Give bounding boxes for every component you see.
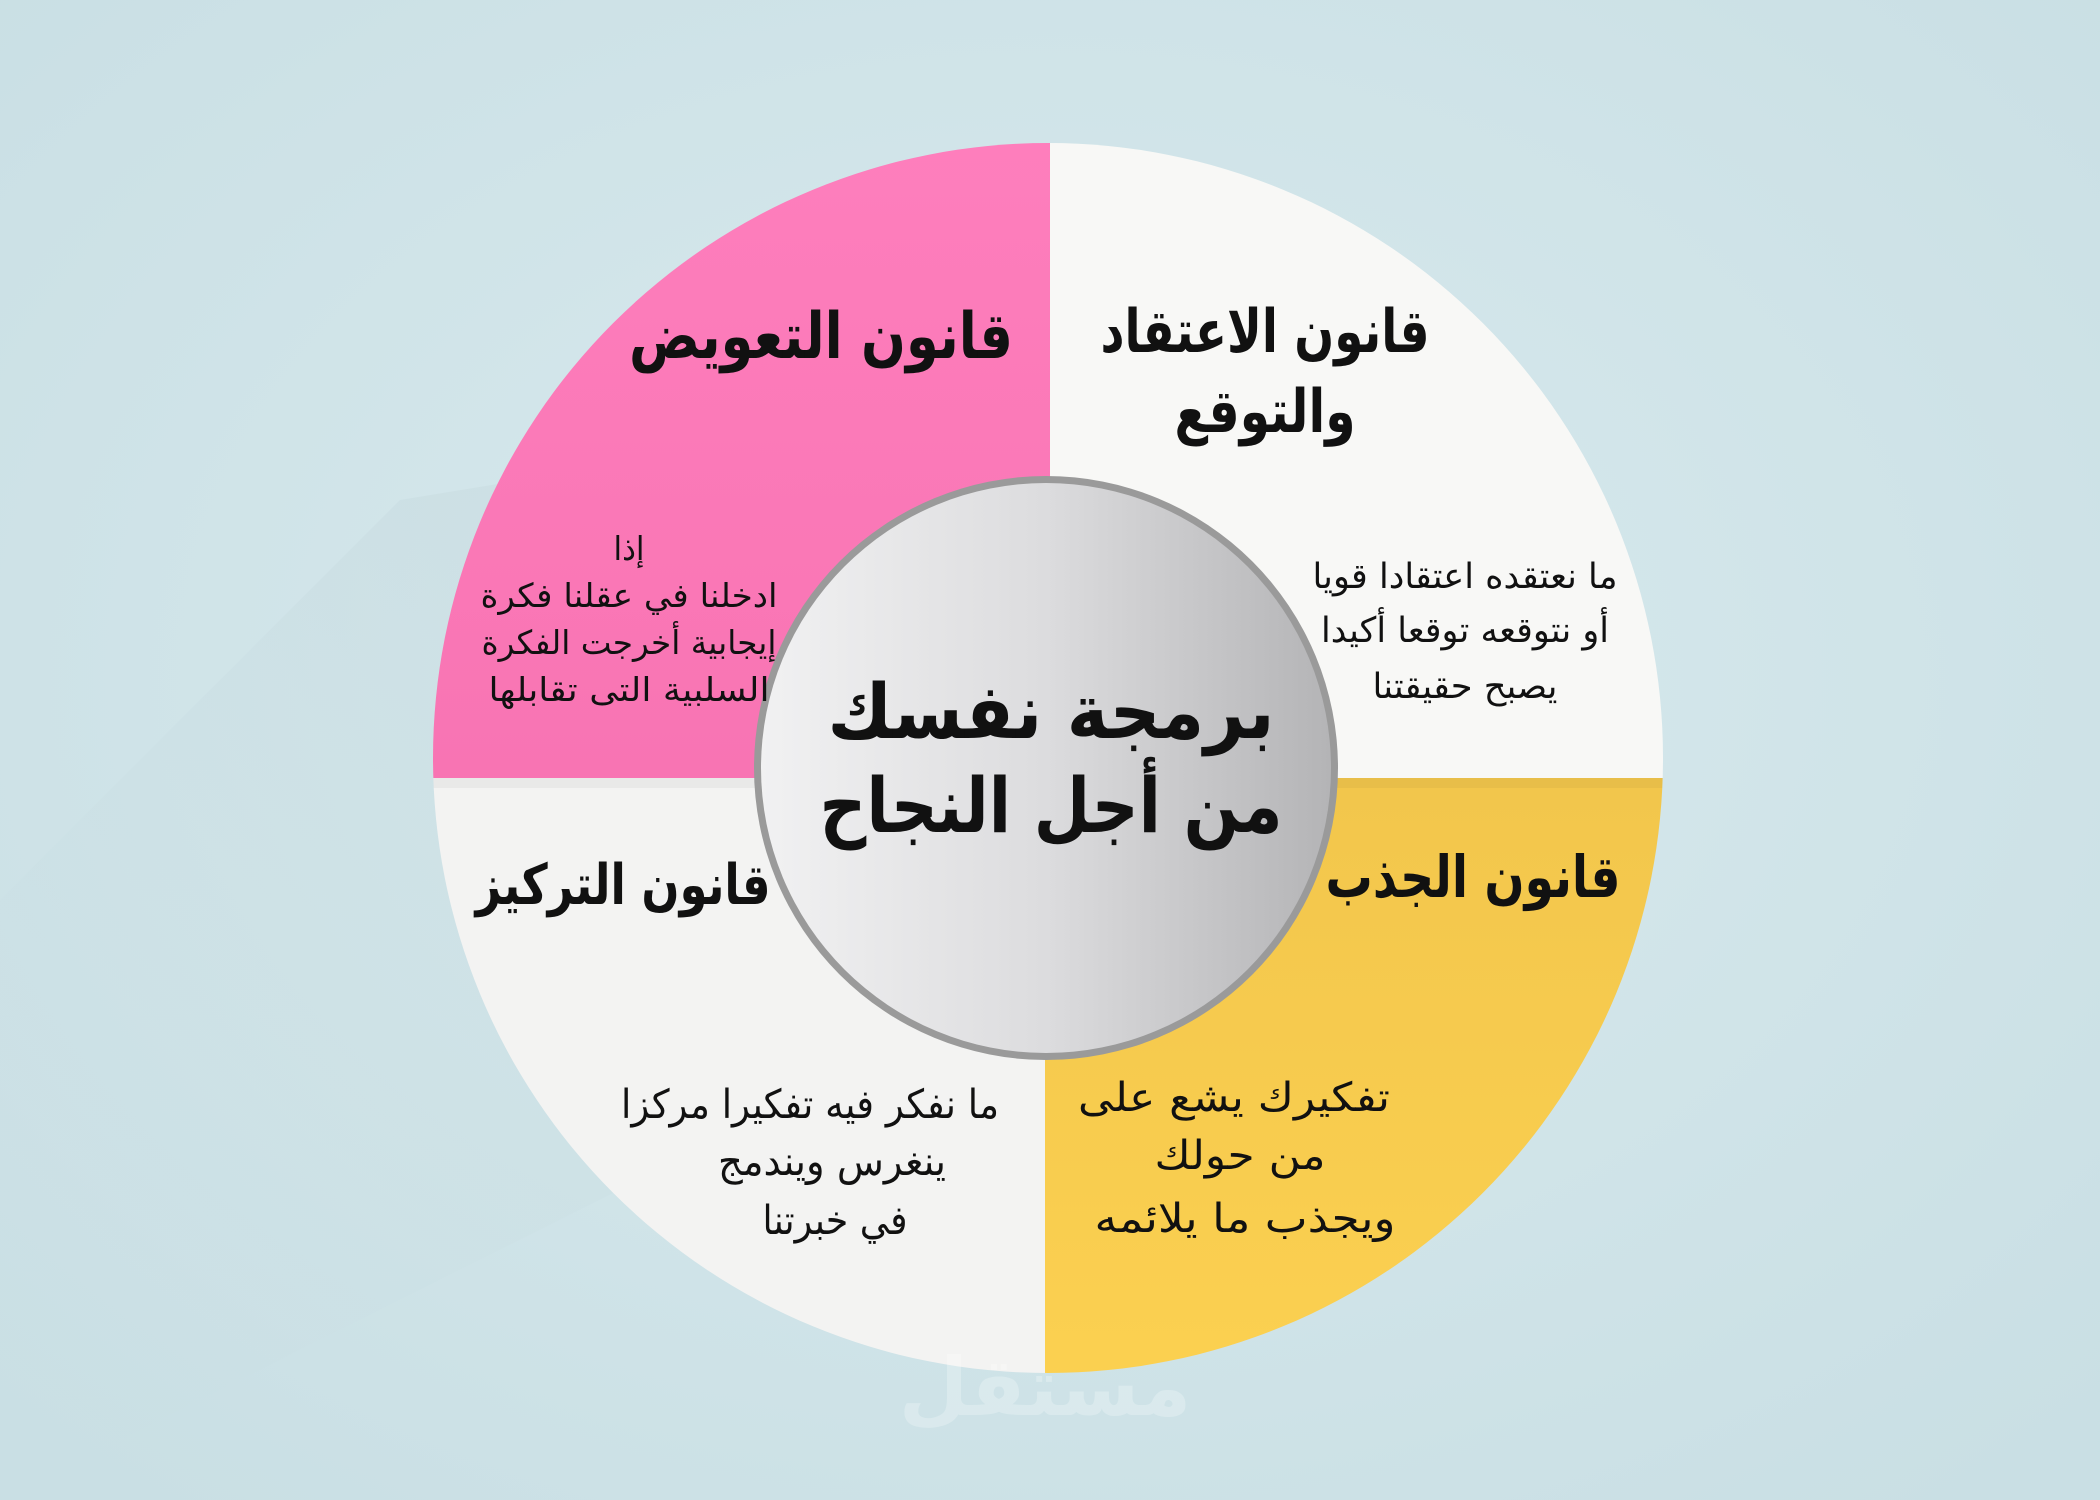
panel: pink: قانون التعويض [629,300,1013,374]
quadrant: top-right white [1050,143,1663,778]
panel: pink: السلبية التى تقابلها [488,670,770,709]
panel: bottom-left: قانون التركيز [473,853,770,918]
main disc [433,143,1663,1373]
panel: bottom-left: في خبرتنا [762,1198,908,1244]
panel: top-right: ما نعتقده اعتقادا قويا [1312,557,1618,597]
panel: pink: إذا [614,529,644,569]
quadrant: top-left pink [433,143,1050,778]
inner circle [754,476,1338,1060]
panel: bottom-left: ما نفكر فيه تفكيرا مركزا [621,1082,999,1128]
center title: برمجة نفسك [828,667,1274,757]
quadrant: bottom-right yellow [1045,778,1663,1373]
panel: top-right: أو نتوقعه توقعا أكيدا [1321,607,1609,651]
panel: pink: ادخلنا في عقلنا فكرة [480,576,778,615]
panel: bottom-left: ينغرس ويندمج [718,1139,946,1185]
panel: bottom-right: تفكيرك يشع على [1078,1075,1390,1121]
panel: bottom-right: قانون الجذب [1326,843,1620,912]
panel: top-right: يصبح حقيقتنا [1372,667,1558,707]
long shadow [0,323,1483,1500]
panel: bottom-right: ويجذب ما يلائمه [1094,1196,1396,1242]
panel: bottom-left [473,853,999,1244]
panel: bottom-right [1078,843,1620,1242]
panel: top-right [1100,297,1618,707]
panel: pink: إيجابية أخرجت الفكرة [482,621,776,663]
panel: top-right: والتوقع [1174,377,1356,447]
quadrant: bottom-left white [433,778,1045,1373]
inner circle: من أجل النجاح [820,756,1282,851]
panel: top-right: قانون الاعتقاد [1100,297,1430,367]
watermark: مستقل [899,1341,1191,1434]
panel: bottom-right: من حولك [1154,1133,1326,1179]
panel: pink [480,300,1013,709]
